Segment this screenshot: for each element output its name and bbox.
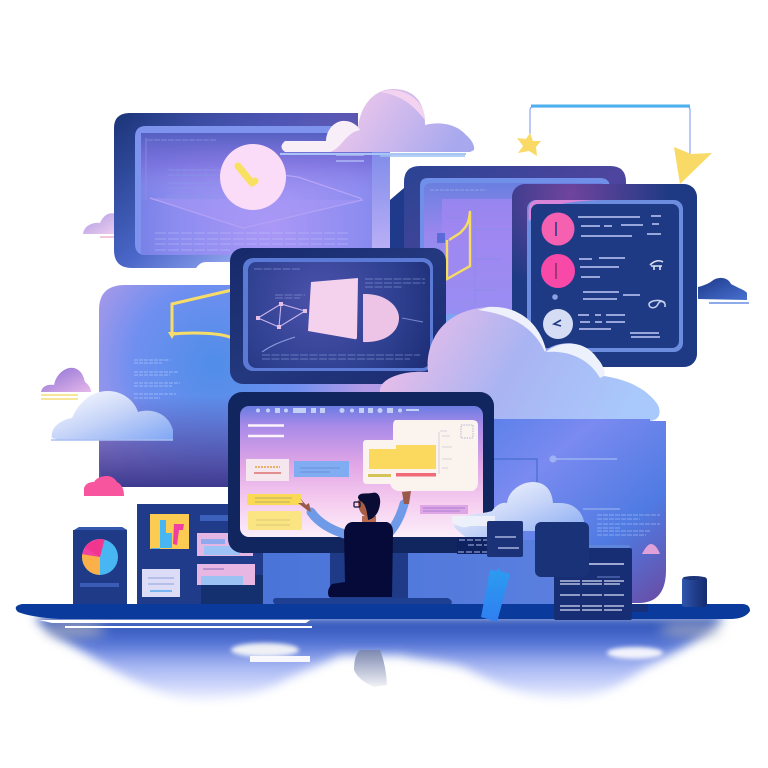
dark card lower with code	[554, 545, 648, 620]
screen heading lines	[248, 426, 284, 436]
cloud: large right	[380, 307, 660, 421]
neck	[362, 516, 376, 524]
yellow connector arrow	[168, 290, 232, 339]
cloud: navy right	[698, 278, 749, 303]
monitor base	[273, 598, 452, 608]
pink half disc	[363, 294, 399, 342]
hands	[298, 491, 411, 512]
panel: front right screen	[512, 184, 697, 367]
storage can	[682, 576, 707, 607]
torso	[328, 522, 393, 597]
network diagram	[256, 302, 307, 329]
pink icon circles	[541, 212, 575, 339]
panel: back right screen	[390, 166, 626, 340]
blue hanging tag	[481, 567, 510, 622]
person reflection	[354, 650, 387, 687]
panel: left book with pie chart	[73, 527, 127, 604]
dark card large square	[535, 522, 589, 577]
cream chart window	[363, 420, 478, 491]
sticky note with bars	[150, 514, 189, 549]
dark card small	[487, 521, 523, 557]
small cloud left of top screen	[83, 213, 116, 237]
dark code strip	[457, 537, 489, 554]
icon: star	[517, 133, 541, 156]
shelf	[16, 604, 750, 619]
yellow chart line	[447, 211, 470, 279]
glyph marks	[649, 261, 665, 308]
panel: right backing panel	[440, 419, 666, 603]
shelf reflection shadow	[34, 617, 725, 700]
cloud: small near monitor	[452, 482, 585, 540]
cloud: pink small	[84, 476, 124, 496]
icon: arrowhead	[674, 147, 712, 184]
inner screen	[135, 126, 372, 255]
icon: pink mini cloud	[642, 544, 660, 554]
pie chart	[82, 539, 118, 575]
left content cards	[246, 459, 468, 530]
frame line with star and arrow	[517, 106, 712, 184]
panel: top-left screen	[114, 113, 390, 268]
person at monitor	[298, 491, 411, 597]
illustration: cloud workspace with floating screens	[16, 89, 750, 702]
panel: left board with notes	[133, 504, 263, 607]
pink document shape	[308, 278, 358, 339]
panel: middle-left large backing panel	[99, 285, 400, 487]
arms	[311, 504, 404, 535]
cloud: top centre	[280, 89, 474, 156]
cloud: white-blue left	[51, 391, 173, 440]
clock circle	[220, 144, 286, 210]
panel: dark centre screen	[230, 248, 446, 384]
note cards	[142, 533, 255, 597]
cloud: small purple left	[41, 368, 91, 399]
text lines	[578, 216, 661, 337]
head and hair	[354, 493, 380, 520]
monitor	[228, 392, 494, 602]
panel: under-monitor blue wall	[262, 540, 562, 606]
toolbar icons	[256, 408, 419, 413]
